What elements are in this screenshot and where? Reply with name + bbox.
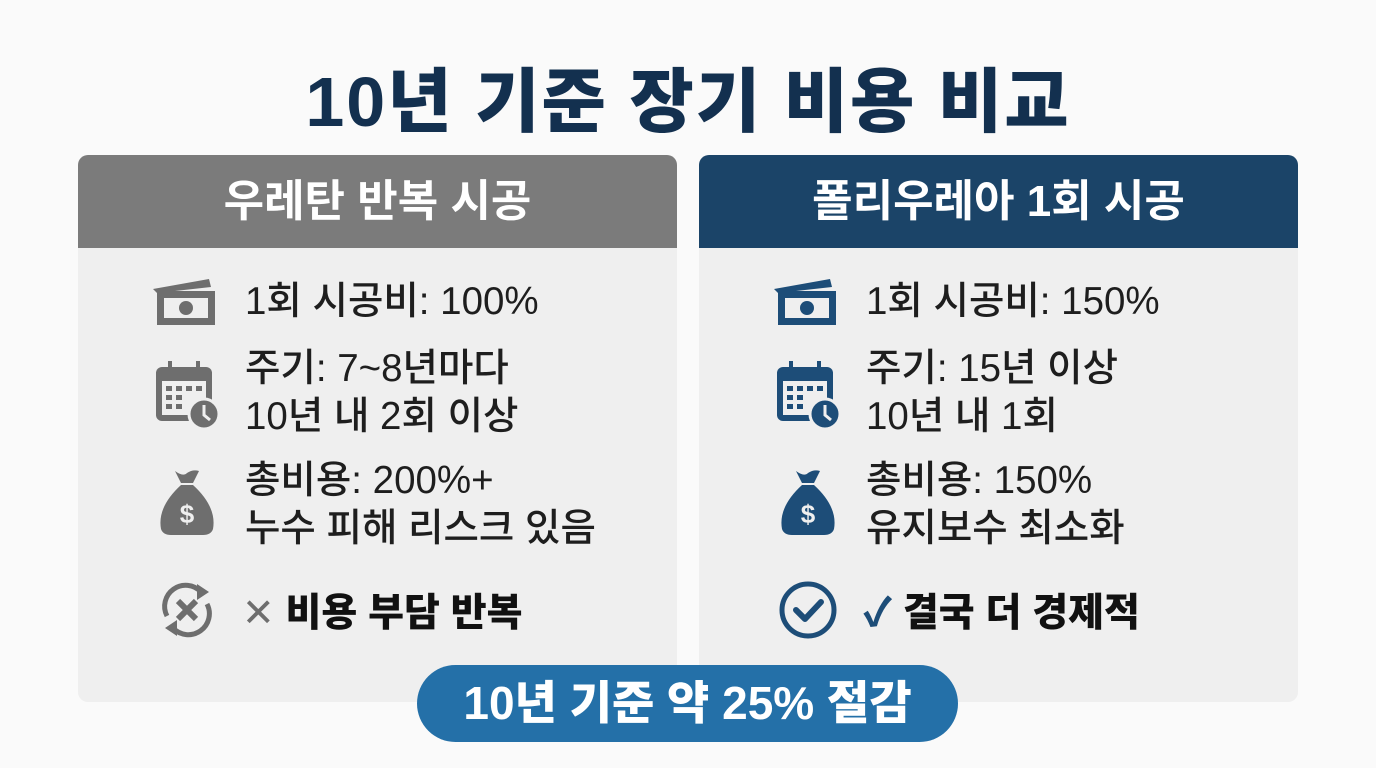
panel: urethane: 10년 내 2회 이상 xyxy=(245,395,518,438)
text rows: 1회 시공비: 150% xyxy=(866,280,1160,323)
text rows: 1회 시공비: 100% xyxy=(245,280,539,323)
header: polyurea xyxy=(699,155,1298,248)
header: urethane xyxy=(78,155,677,248)
icon: cycle x xyxy=(162,582,212,638)
header: polyurea: 폴리우레아 1회 시공 xyxy=(812,177,1185,226)
icon: calendar xyxy=(777,361,838,428)
panel: urethane: 주기: 7~8년마다 xyxy=(245,347,509,390)
title: 10년 기준 장기 비용 비교 xyxy=(305,63,1071,141)
icon: money bag xyxy=(781,470,835,535)
verdict: ✕ 비용 부담 반복 xyxy=(242,592,522,635)
panel: polyurea: 총비용: 150% xyxy=(866,459,1092,502)
icon: money xyxy=(153,279,215,325)
panel: polyurea: 10년 내 1회 xyxy=(866,395,1058,438)
badge: savings xyxy=(417,665,958,742)
icon: check circle xyxy=(780,582,836,638)
icon: calendar xyxy=(156,361,218,428)
panel: urethane: 누수 피해 리스크 있음 xyxy=(245,507,596,550)
panel: polyurea: 주기: 15년 이상 xyxy=(866,347,1118,390)
icon: money bag xyxy=(160,470,214,535)
icon: money xyxy=(774,279,836,325)
header: urethane: 우레탄 반복 시공 xyxy=(224,177,531,226)
panel: polyurea: 유지보수 최소화 xyxy=(866,507,1125,550)
panel: polyurea xyxy=(699,155,1298,702)
panel: urethane: 총비용: 200%+ xyxy=(245,459,494,502)
icon: money bag: $ xyxy=(180,499,195,529)
badge: savings: 10년 기준 약 25% 절감 xyxy=(463,677,912,729)
verdict: ✓ 결국 더 경제적 xyxy=(863,592,1140,635)
icon: money bag: $ xyxy=(801,499,816,529)
panel: urethane xyxy=(78,155,677,702)
